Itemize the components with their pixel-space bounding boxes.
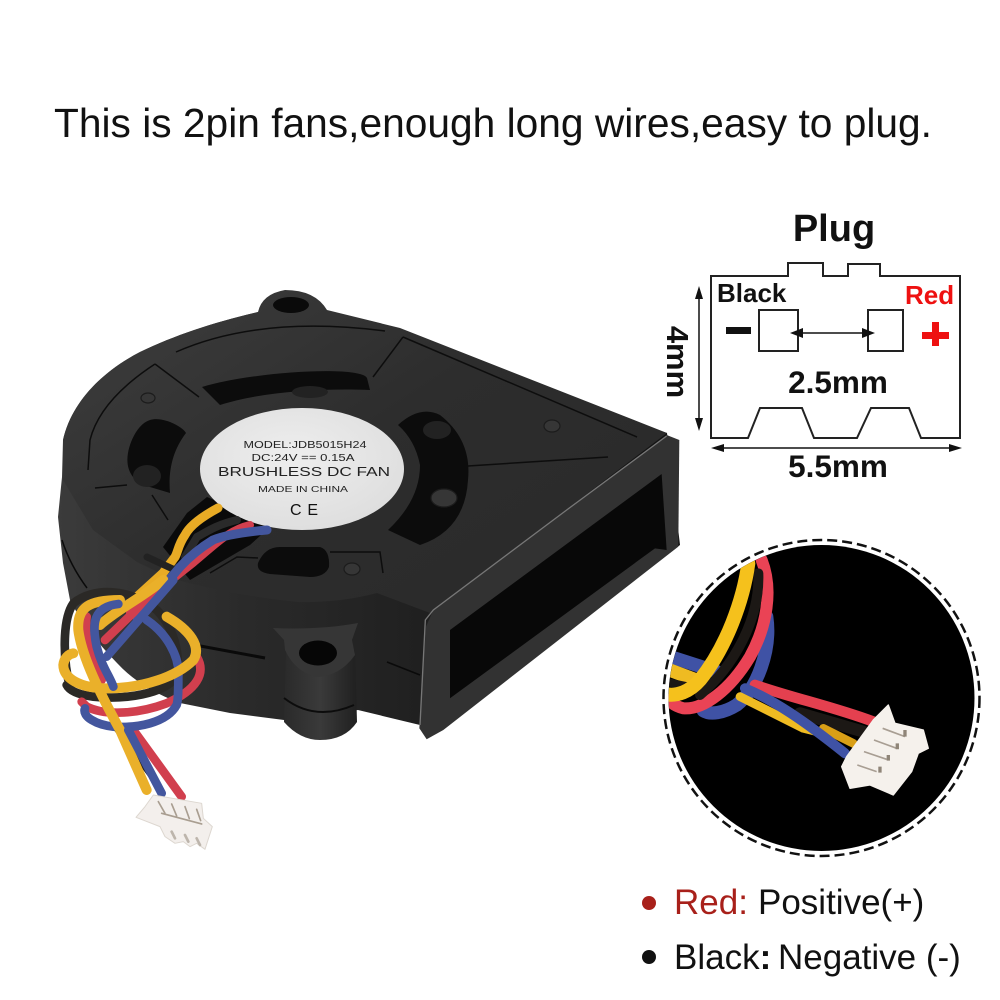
black wire [65,592,178,697]
wall seams [62,540,420,675]
legend black [642,938,961,977]
label sticker: MODEL:JDB5015H24 [244,439,367,451]
width arrow [711,444,962,452]
foam gasket [419,435,679,739]
plug diagram [660,208,962,484]
label sticker: CE [290,502,318,519]
legend black: Black: [674,938,771,977]
yellow wire [63,580,196,790]
label sticker: BRUSHLESS DC FAN [218,465,390,479]
slot interior posts [133,386,451,487]
black lower wire [117,730,163,793]
fan side wall [58,312,680,738]
connector right [842,705,928,795]
fan top face [63,290,667,613]
blue back wire [85,620,178,727]
wire loops [63,580,212,849]
black disc [668,545,974,851]
label sticker: DC:24V == 0.15A [252,453,355,464]
close-up wires [665,560,928,795]
label sticker [200,408,404,530]
tab hole [273,297,309,313]
blue front wire [94,580,173,793]
fan photo [58,290,680,849]
plug heading: Plug [793,208,875,250]
wire exit opening [163,497,272,580]
pin squares [759,310,903,351]
red wire [82,590,200,797]
red label: Red [905,280,954,310]
legend [642,883,961,977]
height arrow [695,286,703,431]
legend red: Positive(+) [758,883,924,922]
height text: 4mm [660,326,695,398]
connector close-up [664,540,980,856]
face seams [88,326,637,573]
plug outline [711,263,960,438]
label sticker: MADE IN CHINA [258,484,348,494]
wires: upper run from fan [130,508,267,618]
legend red: Red: [674,883,748,922]
pitch arrow [790,328,875,338]
width text: 5.5mm [788,448,888,484]
mounting lobe [273,623,358,740]
airflow slots [127,371,468,577]
dashed ring [664,540,980,856]
pitch text: 2.5mm [788,364,888,400]
rivets [141,393,560,575]
plus sign [922,322,949,346]
black label: Black [717,278,787,308]
legend red [642,883,924,922]
minus sign [726,327,751,334]
title: This is 2pin fans,enough long wires,easy to plug. [54,100,932,146]
connector left [136,795,212,849]
legend black: Negative (-) [778,938,961,977]
